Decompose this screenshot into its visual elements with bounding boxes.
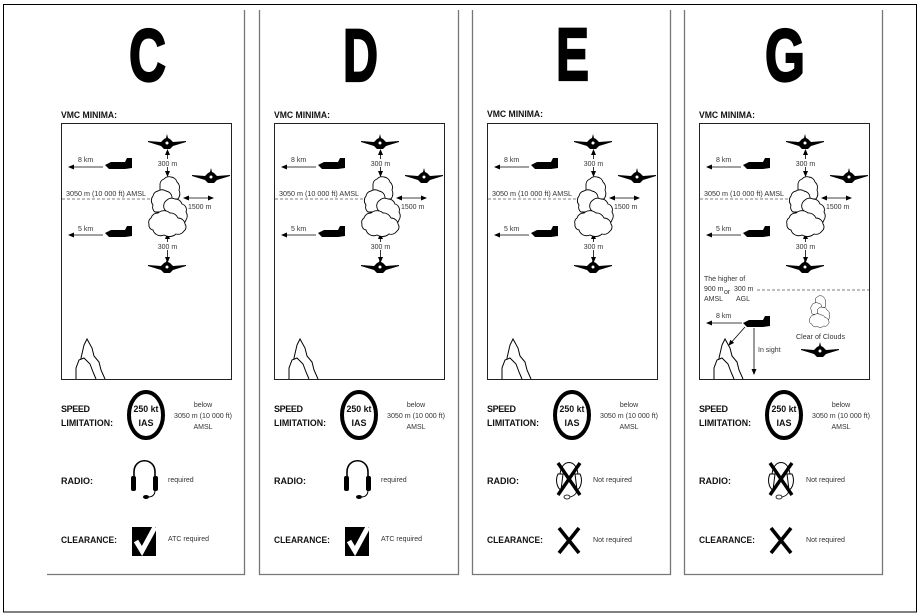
class letter C: C [129,14,166,97]
speed limitation row: SPEED [274,404,304,414]
VMC diagram [488,124,658,380]
panel: airspace class E [472,10,670,574]
speed limitation row: 250 kt [346,404,372,414]
VMC diagram: 3050 m (10 000 ft) AMSL [492,191,572,198]
VMC diagram: 300 m [158,161,177,168]
VMC diagram: 300 m [371,244,390,251]
class letter E: E [556,13,589,96]
heading: VMC minima: VMC MINIMA: [61,110,117,120]
panel: airspace class D [260,10,458,574]
speed limitation row: IAS [776,418,792,428]
clearance row: CLEARANCE: [699,535,755,545]
low-level VMC section: The higher of [704,276,745,283]
VMC diagram: 8 km [78,157,93,164]
VMC diagram: 300 m [796,244,815,251]
clearance row: Not required [593,537,632,544]
low-level VMC section: Clear of Clouds [796,334,846,341]
speed limitation row: AMSL [406,424,426,431]
VMC diagram: 5 km [78,226,93,233]
VMC diagram: 5 km [716,226,731,233]
radio row: RADIO: [487,476,519,486]
speed limitation row: IAS [138,418,154,428]
radio row [699,462,845,499]
heading: VMC minima: VMC MINIMA: [274,110,330,120]
low-level VMC section [704,276,869,374]
VMC diagram [62,124,232,380]
VMC diagram: 1500 m [401,204,425,211]
clearance row: CLEARANCE: [274,535,330,545]
VMC diagram: 8 km [716,157,731,164]
panel border [47,10,244,574]
clearance row: Not required [806,537,845,544]
speed limitation row: LIMITATION: [487,418,539,428]
panel: airspace class C [47,10,244,574]
clearance row [61,527,209,556]
heading: VMC minima: VMC MINIMA: [699,110,755,120]
speed limitation row: AMSL [193,424,213,431]
VMC diagram: 300 m [371,161,390,168]
speed limitation row: LIMITATION: [274,418,326,428]
radio row: required [381,477,407,484]
radio row: Not required [806,477,845,484]
low-level VMC section: 8 km [716,313,731,320]
panel border [684,10,882,574]
VMC diagram: 1500 m [188,204,212,211]
low-level VMC section: 900 m [704,286,724,293]
panel: airspace class G [684,10,882,574]
heading: VMC minima: VMC MINIMA: [487,109,543,119]
radio row [274,461,407,499]
speed limitation row: 250 kt [560,404,584,414]
VMC diagram: 300 m [584,244,603,251]
VMC diagram: 300 m [584,161,603,168]
clearance row: ATC required [168,536,209,543]
speed limitation row: below [620,402,639,409]
speed limitation row: LIMITATION: [61,418,113,428]
low-level VMC section: AGL [736,296,750,303]
class letter G: G [765,14,805,97]
low-level VMC section: 300 m [734,286,754,293]
VMC diagram: 3050 m (10 000 ft) AMSL [66,191,146,198]
speed limitation row: below [194,402,213,409]
VMC diagram: 8 km [291,157,306,164]
speed limitation row: AMSL [619,424,639,431]
VMC diagram: 5 km [504,226,519,233]
VMC diagram [274,124,444,380]
speed limitation row [61,392,232,438]
speed limitation row: IAS [351,418,367,428]
clearance row: CLEARANCE: [61,535,117,545]
speed limitation row: SPEED [699,404,728,414]
clearance row [487,528,632,553]
clearance row: ATC required [381,536,422,543]
clearance row: CLEARANCE: [487,535,543,545]
VMC diagram: 300 m [158,244,177,251]
VMC diagram: 3050 m (10 000 ft) AMSL [704,191,784,198]
speed limitation row: SPEED [61,404,90,414]
speed limitation row: below [832,402,851,409]
speed limitation row: 3050 m (10 000 ft) [600,413,658,420]
radio row: RADIO: [274,476,306,486]
low-level VMC section: In sight [758,347,781,354]
radio row [61,461,194,499]
radio row: Not required [593,477,632,484]
speed limitation row: below [407,402,426,409]
VMC diagram: 1500 m [614,204,638,211]
low-level VMC section: AMSL [704,296,723,303]
radio row: RADIO: [699,476,731,486]
speed limitation row [274,392,445,438]
VMC diagram [700,124,870,380]
speed limitation row: 3050 m (10 000 ft) [174,413,232,420]
radio row: required [168,477,194,484]
speed limitation row: LIMITATION: [699,418,751,428]
speed limitation row: 250 kt [134,404,158,414]
panel border [472,10,670,574]
VMC diagram: 5 km [291,226,306,233]
clearance row [274,527,422,556]
speed limitation row: 3050 m (10 000 ft) [387,413,445,420]
speed limitation row: IAS [564,418,580,428]
radio row: RADIO: [61,476,93,486]
panel border [260,10,458,574]
speed limitation row: 250 kt [772,404,796,414]
VMC diagram: 300 m [796,161,815,168]
class letter D: D [343,14,378,97]
speed limitation row: 3050 m (10 000 ft) [812,413,870,420]
VMC diagram: 1500 m [826,204,850,211]
clearance row [699,528,845,553]
speed limitation row: SPEED [487,404,516,414]
speed limitation row [487,392,658,438]
low-level VMC section: or [724,289,731,296]
VMC diagram: 3050 m (10 000 ft) AMSL [279,191,359,198]
radio row [487,462,632,499]
VMC diagram: 8 km [504,157,519,164]
speed limitation row: AMSL [831,424,851,431]
speed limitation row [699,392,870,438]
